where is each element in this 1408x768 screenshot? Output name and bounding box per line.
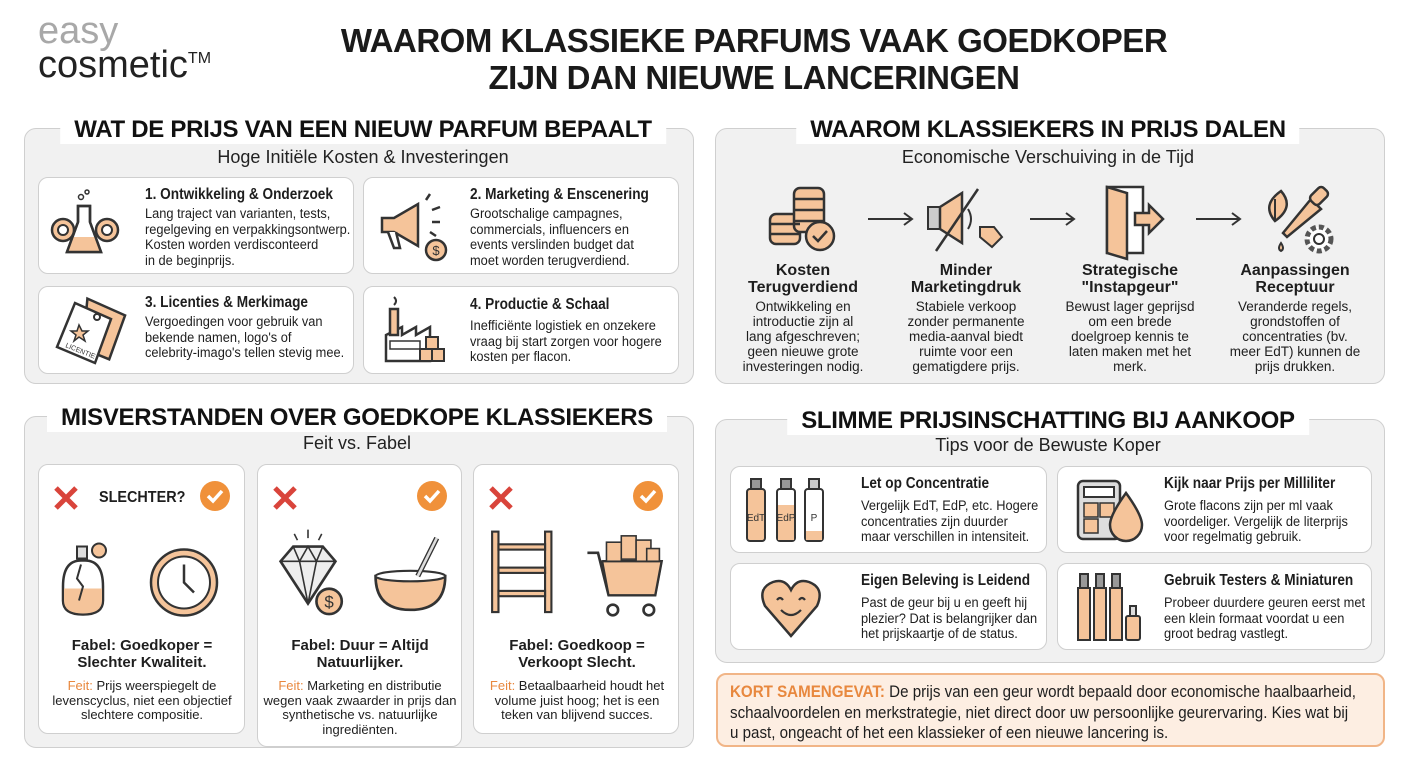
- step 1 text: Terugverdiend: [748, 279, 858, 296]
- step 2 text: gematigdere prijs.: [912, 359, 1020, 374]
- card: price per ml: voordeliger. Vergelijk de literprijs: [1164, 514, 1348, 528]
- step 2 text: [907, 262, 1025, 374]
- card: own experience: het prijskaartje of de status.: [861, 626, 1018, 641]
- card 2: Grootschalige campagnes,: [470, 206, 623, 221]
- icon: x: [273, 486, 297, 510]
- step 1 text: geen nieuwe grote: [747, 344, 859, 359]
- card: concentration: Vergelijk EdT, EdP, etc. Hogere: [861, 498, 1038, 513]
- card: concentration: maar verschillen in intensiteit.: [861, 529, 1029, 544]
- step 3 text: Bewust lager geprijsd: [1065, 299, 1195, 314]
- card 1: Kosten worden verdisconteerd: [145, 237, 318, 252]
- card 1: regelgeving en verpakkingsontwerp.: [145, 222, 350, 236]
- icon: bottle and clock: [62, 542, 218, 617]
- icon: diamond and bowl: [278, 530, 447, 616]
- step 4 text: [1230, 262, 1360, 374]
- card: natural myth: ingrediënten.: [322, 722, 398, 736]
- icon: vials: [1077, 573, 1141, 641]
- card: quality myth: [38, 464, 245, 734]
- title: ZIJN DAN NIEUWE LANCERINGEN: [488, 59, 1020, 96]
- card: testers: [1057, 563, 1372, 650]
- subtitle: Economische Verschuiving in de Tijd: [902, 147, 1194, 167]
- icon: check: [633, 481, 663, 511]
- card: sales myth: volume juist hoog; het is een: [495, 692, 659, 708]
- card: quality myth: Slechter Kwaliteit.: [77, 654, 207, 671]
- arrow: [1030, 212, 1076, 226]
- card 1: 1. Ontwikkeling & Onderzoek: [145, 186, 333, 203]
- card: testers: Gebruik Testers & Miniaturen: [1164, 572, 1353, 589]
- icon: leaf dropper gear: [1268, 186, 1334, 254]
- logo: easy: [38, 10, 118, 52]
- card: testers: groot bedrag vastlegt.: [1164, 626, 1288, 641]
- card 3: 3. Licenties & Merkimage: [145, 294, 308, 311]
- icon: smiling heart: [761, 580, 821, 638]
- icon: check: [417, 481, 447, 511]
- card 2: [363, 177, 679, 274]
- card: natural myth: [257, 464, 462, 747]
- card 1: [38, 177, 354, 274]
- card 4: kosten per flacon.: [470, 349, 571, 364]
- icon: megaphone: $: [432, 243, 440, 258]
- step 2 text: Minder: [940, 262, 992, 279]
- card: natural myth: Natuurlijker.: [317, 654, 403, 671]
- title: [340, 22, 1167, 96]
- icon: check: [200, 481, 230, 511]
- card: natural myth: Feit: Marketing en distributie: [278, 678, 442, 693]
- logo: [38, 10, 211, 86]
- step 4 text: grondstoffen of: [1250, 314, 1340, 329]
- step 1 text: Kosten: [776, 262, 830, 279]
- card: own experience: plezier? Dat is belangrijker dan: [861, 610, 1037, 626]
- card 2: moet worden terugverdiend.: [470, 252, 630, 268]
- icon: license tags: [55, 296, 127, 365]
- heading: SLIMME PRIJSINSCHATTING BIJ AANKOOP: [801, 407, 1295, 434]
- card 3: bekende namen, logo's of: [145, 330, 291, 344]
- icon: three bottles: P: [811, 513, 818, 524]
- card: quality myth: slechtere compositie.: [81, 707, 203, 722]
- icon: three bottles: EdP: [777, 513, 796, 524]
- card: sales myth: teken van blijvend succes.: [501, 707, 653, 722]
- step 3 text: laten maken met het: [1069, 344, 1191, 359]
- step 2 text: media-aanval biedt: [909, 329, 1023, 344]
- card: price per ml: Kijk naar Prijs per Milliliter: [1164, 475, 1335, 492]
- card: testers: een klein formaat voordat u een: [1164, 610, 1344, 626]
- card 4: Inefficiënte logistiek en onzekere: [470, 318, 656, 333]
- card: quality myth: SLECHTER?: [99, 489, 185, 506]
- card 4: vraag bij start zorgen voor hogere: [470, 334, 662, 348]
- heading: WAT DE PRIJS VAN EEN NIEUW PARFUM BEPAALT: [74, 116, 652, 143]
- icon: shelf and cart: [491, 530, 664, 617]
- arrow: [1196, 212, 1242, 226]
- card: quality myth: levenscyclus, niet een objectief: [52, 692, 232, 708]
- summary callout: KORT SAMENGEVAT: De prijs van een geur wordt bepaald door economische haalbaarheid,: [730, 682, 1356, 701]
- card: quality myth: Feit: Prijs weerspiegelt de: [68, 678, 216, 693]
- card 2: 2. Marketing & Enscenering: [470, 186, 649, 203]
- card 1: in de beginprijs.: [145, 252, 235, 268]
- step 1 text: investeringen nodig.: [743, 359, 863, 374]
- arrow: [868, 212, 914, 226]
- step 3 text: doelgroep kennis te: [1071, 329, 1189, 344]
- icon: diamond and bowl: $: [324, 593, 334, 612]
- step 2 text: Marketingdruk: [911, 279, 1021, 296]
- panel: why classics drop: [715, 128, 1385, 384]
- step 1 text: [743, 262, 863, 374]
- step 4 text: Veranderde regels,: [1238, 299, 1352, 314]
- step 4 text: meer EdT) kunnen de: [1230, 344, 1360, 359]
- card: natural myth: wegen vaak zwaarder in prijs dan: [264, 692, 456, 708]
- panel: misconceptions: [24, 416, 694, 748]
- step 4 text: Receptuur: [1255, 279, 1335, 296]
- step 2 text: Stabiele verkoop: [916, 299, 1016, 314]
- step 4 text: concentraties (bv.: [1242, 329, 1348, 344]
- step 1 text: lang afgeschreven;: [746, 329, 860, 344]
- step 1 text: introductie zijn al: [753, 314, 853, 329]
- icon: coins: [768, 186, 836, 252]
- step 1 text: Ontwikkeling en: [755, 299, 851, 314]
- step 4 text: prijs drukken.: [1255, 359, 1335, 374]
- title: WAAROM KLASSIEKE PARFUMS VAAK GOEDKOPER: [341, 22, 1167, 59]
- card 2: commercials, influencers en: [470, 222, 629, 236]
- card 4: 4. Productie & Schaal: [470, 296, 609, 313]
- step 4 text: Aanpassingen: [1240, 262, 1350, 279]
- card: own experience: Eigen Beleving is Leidend: [861, 572, 1030, 589]
- card: testers: Probeer duurdere geuren eerst met: [1164, 595, 1365, 610]
- card: concentration: [730, 466, 1047, 553]
- card: sales myth: Feit: Betaalbaarheid houdt het: [490, 678, 664, 693]
- step 3 text: merk.: [1113, 359, 1147, 374]
- panel: smart pricing: [715, 419, 1385, 663]
- logo: cosmeticTM: [38, 44, 211, 86]
- card 3: [38, 286, 354, 374]
- subtitle: Hoge Initiële Kosten & Investeringen: [217, 147, 509, 167]
- icon: factory: [384, 296, 445, 362]
- card: price per ml: Grote flacons zijn per ml vaak: [1164, 498, 1333, 513]
- card: concentration: concentraties zijn duurder: [861, 514, 1008, 528]
- icon: license tags: LICENTIE: [64, 342, 96, 361]
- summary callout: schaalvoordelen en merkstrategie, niet direct door uw persoonlijke geurervaring. Kies wat bij: [730, 702, 1348, 722]
- card 2: events verslinden budget dat: [470, 237, 634, 252]
- card: natural myth: Fabel: Duur = Altijd: [291, 637, 429, 654]
- step 2 text: zonder permanente: [907, 314, 1025, 329]
- icon: muted speaker: [927, 188, 1004, 252]
- card: own experience: [730, 563, 1047, 650]
- step 3 text: [1065, 262, 1195, 374]
- icon: three bottles: [746, 478, 824, 542]
- subtitle: Tips voor de Bewuste Koper: [935, 435, 1161, 455]
- card 1: Lang traject van varianten, tests,: [145, 206, 330, 221]
- card: sales myth: [473, 464, 679, 734]
- card: concentration: Let op Concentratie: [861, 475, 989, 492]
- step 3 text: Strategische: [1082, 262, 1178, 279]
- card 3: celebrity-imago's tellen stevig mee.: [145, 345, 344, 360]
- card: sales myth: Verkoopt Slecht.: [518, 654, 636, 671]
- card: sales myth: Fabel: Goedkoop =: [509, 637, 645, 654]
- icon: megaphone: [380, 193, 448, 262]
- icon: flask gears: [50, 189, 120, 254]
- step 3 text: om een brede: [1088, 314, 1172, 329]
- summary callout: u past, ongeacht of het een klassieker of een nieuwe lancering is.: [730, 723, 1168, 742]
- icon: x: [489, 486, 513, 510]
- subtitle: Feit vs. Fabel: [303, 433, 411, 453]
- step 2 text: ruimte voor een: [919, 344, 1013, 359]
- icon: three bottles: EdT: [747, 513, 765, 524]
- card 3: Vergoedingen voor gebruik van: [145, 314, 323, 329]
- icon: calculator drop: [1076, 480, 1144, 542]
- card: price per ml: [1057, 466, 1372, 553]
- panel: new perfume price: [24, 128, 694, 384]
- card: quality myth: Fabel: Goedkoper =: [72, 637, 212, 654]
- card: price per ml: voor regelmatig gebruik.: [1164, 529, 1302, 544]
- icon: door: [1106, 185, 1165, 261]
- step 3 text: "Instapgeur": [1082, 279, 1178, 296]
- icon: x: [54, 486, 78, 510]
- heading: WAAROM KLASSIEKERS IN PRIJS DALEN: [810, 116, 1286, 143]
- card: natural myth: synthetische vs. natuurlijke: [282, 707, 438, 722]
- card: own experience: Past de geur bij u en geeft hij: [861, 595, 1027, 610]
- card 4: [363, 286, 679, 374]
- heading: MISVERSTANDEN OVER GOEDKOPE KLASSIEKERS: [61, 404, 653, 431]
- summary callout: [716, 673, 1385, 747]
